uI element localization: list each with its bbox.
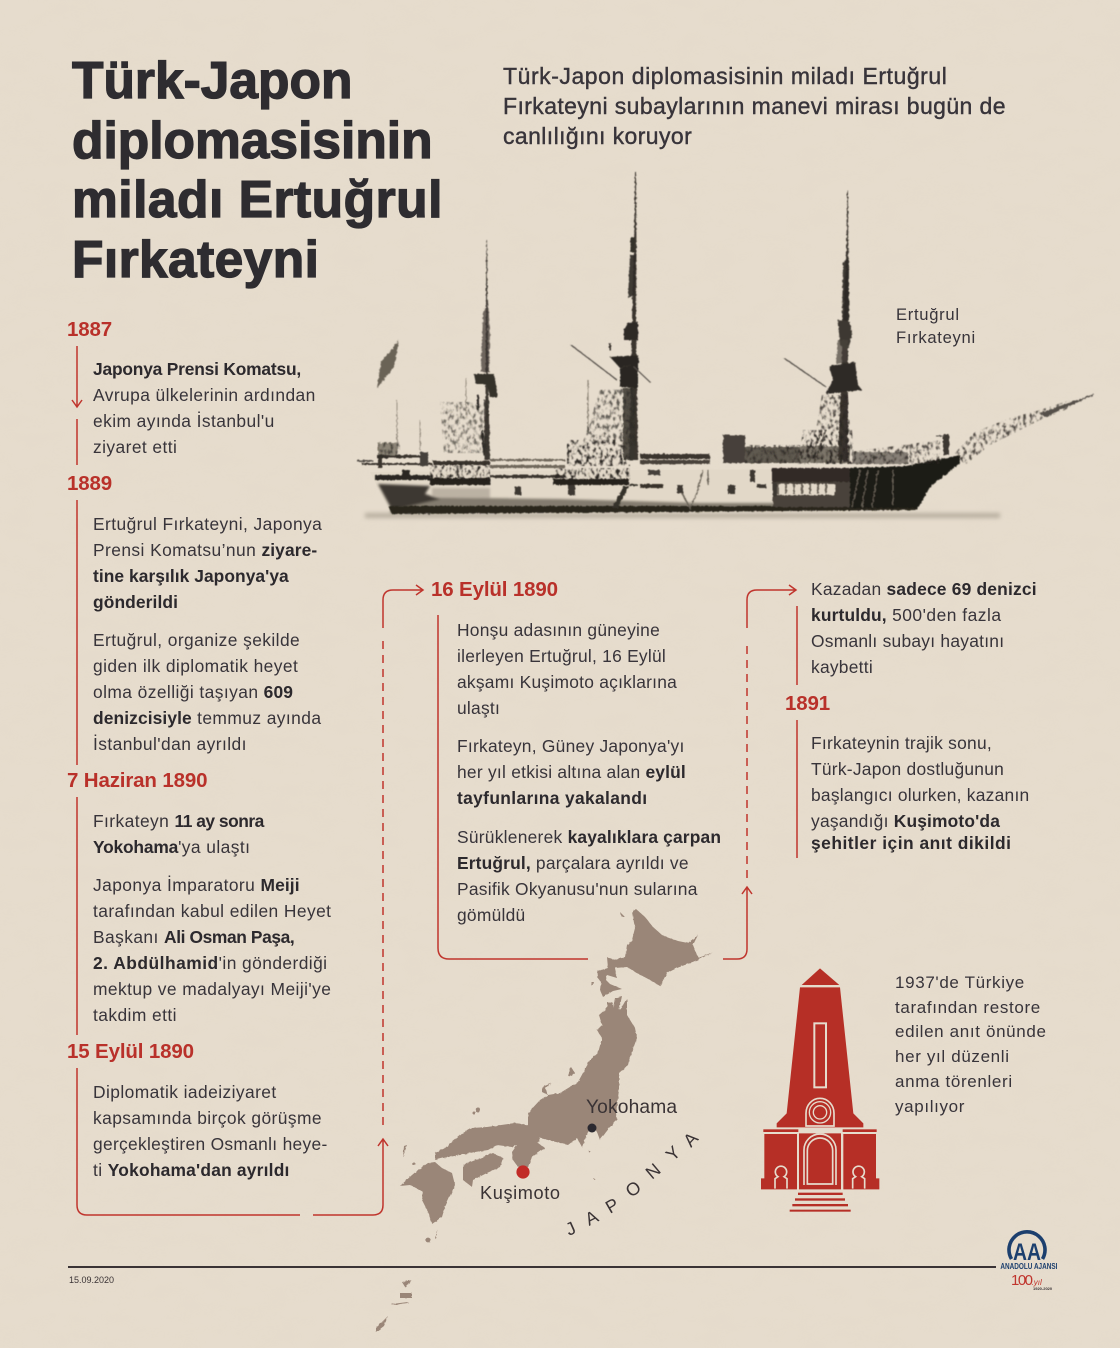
text: tayfun: tayfunlarına yakalandı — [457, 788, 647, 808]
subtitle: Fırkateyni subaylarının manevi mirası bugün de — [503, 93, 1006, 119]
text: monument note: 1937'de Türkiye — [895, 973, 1025, 992]
logo: Anadolu Ajansı: ANADOLU AJANSI — [1000, 1262, 1057, 1271]
text: Meiji: Başkanı Ali Osman Paşa, — [93, 927, 294, 947]
text: monument note: her yıl düzenli — [895, 1047, 1010, 1066]
text: Yokohama: Yokohama'ya ulaştı — [93, 837, 250, 857]
hull details — [388, 506, 918, 514]
text: iadeiziyaret — [93, 1082, 328, 1180]
JAPONYA lettering — [562, 1128, 702, 1240]
ship caption: Fırkateyni — [896, 328, 976, 346]
text: Honşu: Honşu adasının güneyine — [457, 620, 660, 640]
text: tayfun — [457, 736, 686, 808]
ship caption: Ertuğrul — [896, 305, 960, 324]
text: anıt: Fırkateynin trajik sonu, — [811, 733, 992, 753]
text: iadeiziyaret: Diplomatik iadeiziyaret — [93, 1082, 277, 1102]
text: monument note: tarafından restore — [895, 998, 1041, 1017]
main mast — [629, 172, 638, 460]
text: Honşu: ilerleyen Ertuğrul, 16 Eylül — [457, 646, 666, 666]
text: survivors: Osmanlı subayı hayatını — [811, 631, 1004, 651]
mizzen mast — [484, 240, 490, 460]
text: Komatsu: ziyaret etti — [93, 437, 177, 457]
year 1891: 1891 — [785, 692, 830, 715]
text: Honşu: akşamı Kuşimoto açıklarına — [457, 672, 677, 692]
text: tayfun: Fırkateyn, Güney Japonya'yı — [457, 736, 685, 756]
date 15 Eylül 1890: 15 Eylül 1890 — [67, 1040, 194, 1063]
text: Komatsu — [93, 359, 316, 457]
text: survivors: kurtuldu, 500'den fazla — [811, 605, 1002, 625]
logo: Anadolu Ajansı: 1920-2020 — [1033, 1286, 1052, 1291]
text: kayalıklar: Ertuğrul, parçalara ayrıldı ve — [457, 853, 689, 873]
text: iadeiziyaret: ti Yokohama'dan ayrıldı — [93, 1160, 290, 1180]
JAPONYA lettering: P — [602, 1194, 622, 1217]
logo: Anadolu Ajansı — [1000, 1230, 1057, 1291]
fore mast — [838, 190, 848, 460]
text: heyet: Ertuğrul, organize şekilde — [93, 630, 300, 650]
text: Meiji: mektup ve madalyayı Meiji'ye — [93, 979, 331, 999]
title: Fırkateyni — [72, 230, 319, 288]
ship caption — [896, 305, 976, 346]
JAPONYA lettering: N — [642, 1159, 665, 1183]
text: ziyaret: Prensi Komatsu’nun ziyare- — [93, 540, 317, 560]
text: anıt: başlangıcı olurken, kazanın — [811, 785, 1029, 805]
text: ziyaret: tine karşılık Japonya'ya — [93, 566, 289, 586]
date 7 Haziran 1890: 7 Haziran 1890 — [67, 769, 207, 792]
text: heyet: olma özelliği taşıyan 609 — [93, 682, 293, 702]
text: monument note: anma törenleri — [895, 1072, 1013, 1091]
flag — [377, 340, 399, 388]
deck structures — [377, 455, 427, 458]
JAPONYA lettering: A — [582, 1206, 602, 1230]
text: tayfun: her yıl etkisi altına alan eylül — [457, 762, 686, 782]
title: miladı Ertuğrul — [72, 170, 443, 228]
logo: Anadolu Ajansı: AA — [1013, 1239, 1041, 1266]
Honshu — [435, 996, 637, 1167]
text: monument note: yapılıyor — [895, 1097, 965, 1116]
subtitle: Türk-Japon diplomasisinin miladı Ertuğrul — [503, 63, 947, 89]
year 1889: 1889 — [67, 472, 112, 495]
text: kayalıklar — [457, 827, 721, 925]
text: anıt: Türk-Japon dostluğunun — [811, 759, 1004, 779]
year 1887: 1887 — [67, 318, 112, 341]
text: survivors: Kazadan sadece 69 denizci — [811, 579, 1037, 599]
JAPONYA lettering: O — [622, 1177, 645, 1201]
text: iadeiziyaret: kapsamında birçok görüşme — [93, 1108, 322, 1128]
text: survivors: kaybetti — [811, 657, 873, 677]
Kuşimoto marker — [516, 1165, 530, 1179]
title: diplomasisinin — [72, 110, 433, 168]
text: ziyaret — [93, 514, 322, 612]
hull base — [370, 468, 954, 512]
text: kayalıklar: Sürüklenerek kayalıklara çarpan — [457, 827, 721, 847]
Shikoku — [463, 1153, 503, 1187]
text: Yokohama — [93, 811, 264, 857]
Kyushu — [400, 1162, 455, 1224]
JAPONYA lettering: A — [679, 1128, 702, 1151]
text: anıt: şehitler için anıt dikildi — [811, 833, 1011, 853]
text: Meiji: 2. Abdülhamid'in gönderdiği — [93, 953, 327, 973]
subtitle: canlılığını koruyor — [503, 123, 692, 149]
text: Komatsu: Avrupa ülkelerinin ardından — [93, 385, 316, 405]
text: anıt — [811, 733, 1029, 853]
text: Komatsu: Japonya Prensi Komatsu, — [93, 359, 301, 379]
text: Honşu: ulaştı — [457, 698, 500, 718]
date 16 Eylül 1890: 16 Eylül 1890 — [431, 578, 558, 601]
text: Komatsu: ekim ayında İstanbul'u — [93, 411, 275, 431]
text: Meiji — [93, 875, 331, 1025]
text: heyet: giden ilk diplomatik heyet — [93, 656, 298, 676]
mottled rigging and decks — [378, 388, 1070, 480]
text: Meiji: takdim etti — [93, 1005, 177, 1025]
text: survivors — [811, 579, 1037, 677]
text: Meiji: tarafından kabul edilen Heyet — [93, 901, 331, 921]
text: Meiji: Japonya İmparatoru Meiji — [93, 875, 300, 895]
text: Honşu — [457, 620, 677, 718]
water shadow — [365, 513, 1000, 518]
text: heyet: İstanbul'dan ayrıldı — [93, 734, 247, 754]
text: kayalıklar: Pasifik Okyanusu'nun sularına — [457, 879, 698, 899]
logo: Anadolu Ajansı: 100.yıl — [1011, 1272, 1042, 1289]
text: ziyaret: gönderildi — [93, 592, 178, 612]
text: anıt: yaşandığı Kuşimoto'da — [811, 811, 1000, 831]
text: monument note: edilen anıt önünde — [895, 1022, 1047, 1041]
subtitle — [503, 63, 1006, 150]
title: Türk-Japon — [72, 51, 352, 109]
text: monument note — [895, 973, 1047, 1116]
text: heyet — [93, 630, 322, 754]
footer rule — [68, 1266, 996, 1268]
Hokkaido — [597, 909, 713, 997]
text: heyet: denizcisiyle temmuz ayında — [93, 708, 321, 728]
JAPONYA lettering: Y — [662, 1142, 684, 1165]
label Yokohama: Yokohama — [586, 1097, 677, 1118]
small islands — [376, 912, 625, 1332]
JAPONYA lettering: J — [562, 1218, 579, 1240]
label Kuşimoto: Kuşimoto — [480, 1183, 561, 1203]
text: Yokohama: Fırkateyn 11 ay sonra — [93, 811, 264, 831]
Yokohama marker — [588, 1124, 596, 1132]
text: kayalıklar: gömüldü — [457, 905, 525, 925]
text: iadeiziyaret: gerçekleştiren Osmanlı heye- — [93, 1134, 328, 1154]
title — [72, 51, 443, 289]
date: 15.09.2020 — [69, 1275, 114, 1285]
text: ziyaret: Ertuğrul Fırkateyni, Japonya — [93, 514, 322, 534]
